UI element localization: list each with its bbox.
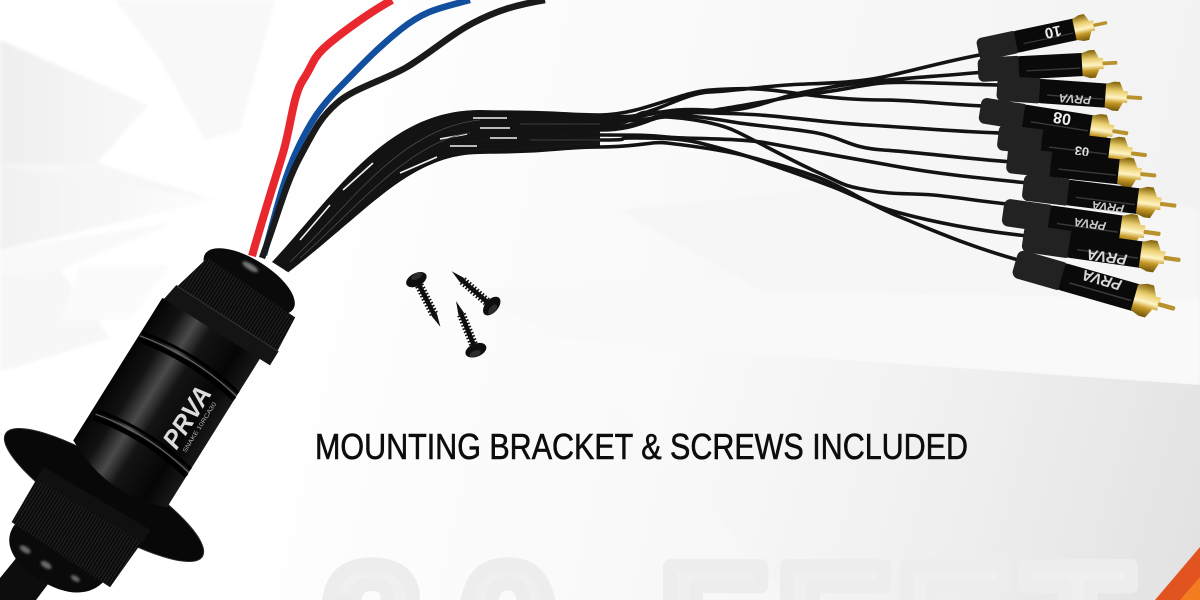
plug 08 xyxy=(978,95,1130,148)
top gland nut xyxy=(164,250,301,365)
plug branded 7 xyxy=(1021,172,1178,221)
plug branded 8: PRVA xyxy=(1073,215,1107,233)
mounting unit xyxy=(0,196,351,600)
screw right xyxy=(445,263,504,319)
screw bottom xyxy=(446,297,489,360)
top gland dome xyxy=(193,235,305,328)
cylinder rings xyxy=(90,327,242,476)
plug 08: 08 xyxy=(1052,108,1072,127)
lower dome highlights xyxy=(17,542,81,587)
plug branded 10 xyxy=(1010,247,1180,325)
screws xyxy=(404,263,504,360)
plug 03: 03 xyxy=(1074,143,1090,160)
black power wire xyxy=(262,0,545,258)
flange xyxy=(0,408,218,582)
plug branded 10: PRVA xyxy=(1080,266,1124,293)
plug 10 xyxy=(975,10,1110,63)
RCA plugs xyxy=(975,10,1183,325)
plug 09 xyxy=(977,49,1118,84)
orange corner accent xyxy=(1155,547,1200,600)
plug branded 7: PRVA xyxy=(1091,198,1125,216)
caption: MOUNTING BRACKET & SCREWS INCLUDED xyxy=(315,426,968,467)
metal cylinder xyxy=(64,293,263,516)
output cable xyxy=(0,535,70,600)
plug branded 9 xyxy=(1021,222,1183,276)
red wire xyxy=(252,0,392,256)
plug branded xyxy=(996,73,1143,113)
brand label on cylinder: PRVA xyxy=(156,380,218,454)
plug 06 xyxy=(1005,145,1158,191)
plug branded: PRVA xyxy=(1058,91,1092,107)
plug branded 9: PRVA xyxy=(1086,245,1128,268)
screw left xyxy=(404,269,450,332)
lower gland nut xyxy=(8,464,151,589)
dome highlight xyxy=(241,259,259,274)
plug branded 8 xyxy=(1001,196,1163,250)
plug 03 xyxy=(996,122,1149,170)
signal cable bundle xyxy=(272,54,1028,272)
lower dome xyxy=(0,524,105,600)
brand label on cylinder: SNAKE 10RCA30 xyxy=(182,401,219,454)
plug 10: 10 xyxy=(1043,21,1063,42)
blue wire xyxy=(264,0,470,255)
